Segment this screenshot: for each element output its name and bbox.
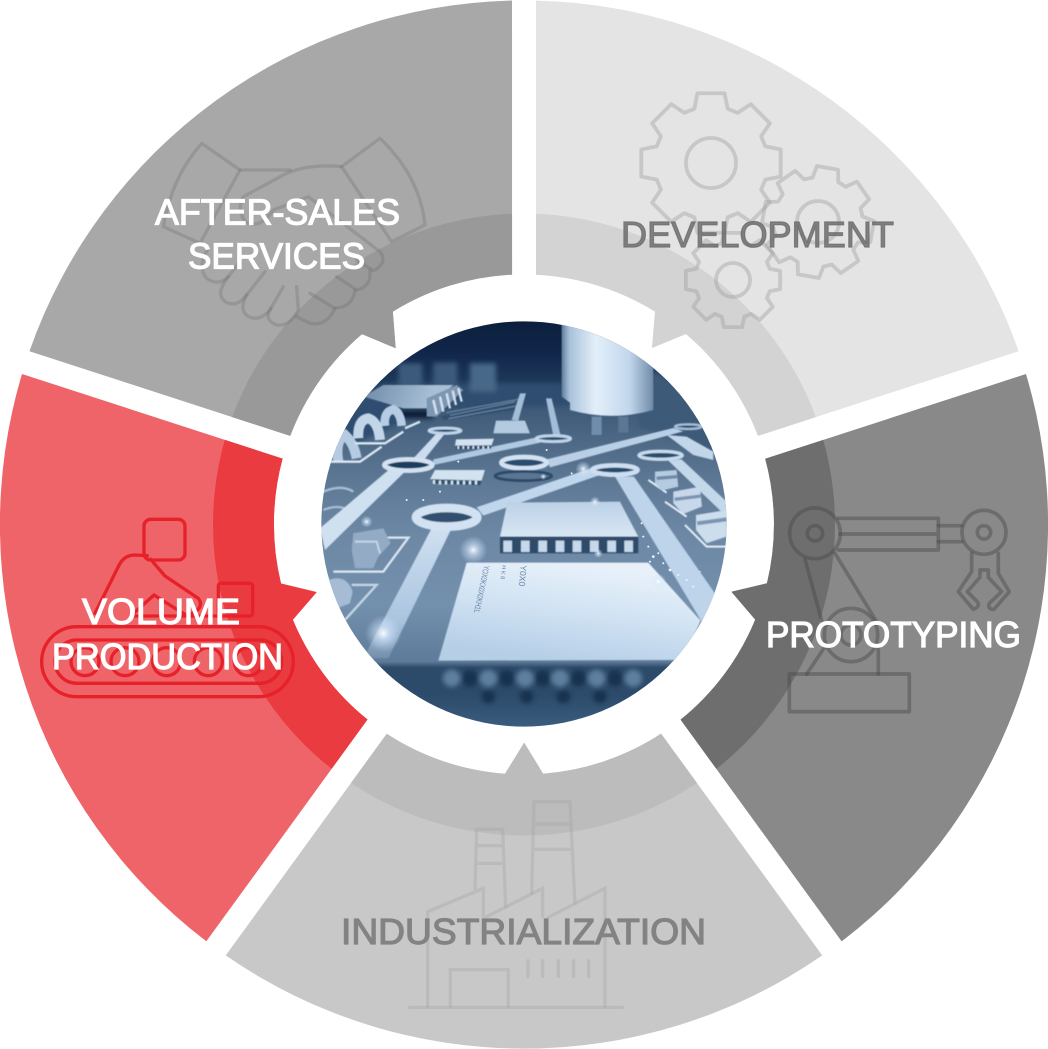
top right trace columns	[512, 393, 561, 436]
segment: development	[536, 1, 1019, 436]
central circuit board photo: Y0X0	[517, 565, 529, 587]
icon: gears	[641, 93, 882, 327]
central circuit board photo: H K 8	[499, 565, 506, 580]
label: volume production	[52, 591, 283, 677]
segment: volume production	[0, 374, 368, 941]
central circuit board photo	[317, 317, 730, 730]
sparkles	[460, 537, 486, 562]
segment: after-sales services	[29, 1, 512, 436]
left connector	[363, 385, 453, 408]
label: volume production: PRODUCTION	[52, 636, 283, 677]
left components	[333, 538, 408, 572]
icon: handshake	[163, 138, 425, 325]
label: after-sales services: AFTER-SALES	[155, 192, 400, 232]
segment: industrialization	[226, 734, 822, 1049]
label: industrialization: INDUSTRIALIZATION	[341, 911, 706, 952]
small chips	[430, 470, 485, 481]
label: after-sales services: SERVICES	[188, 236, 365, 276]
inductors	[385, 409, 402, 426]
large capacitor	[562, 320, 658, 416]
icon: factory	[409, 802, 623, 1007]
traces	[363, 528, 452, 658]
label: after-sales services	[155, 192, 400, 276]
chip 1	[500, 502, 638, 537]
ring pads	[416, 508, 477, 527]
icon: robot arm	[789, 508, 1009, 712]
main chip	[438, 563, 701, 661]
label: volume production: VOLUME	[82, 591, 240, 632]
right components	[648, 480, 727, 547]
chip marking text: YOX0KX0X0KH1L	[472, 565, 492, 614]
icon: conveyor operator	[42, 519, 293, 697]
label: prototyping: PROTOTYPING	[766, 614, 1021, 655]
label: development: DEVELOPMENT	[621, 214, 894, 255]
segment: prototyping	[681, 374, 1048, 941]
